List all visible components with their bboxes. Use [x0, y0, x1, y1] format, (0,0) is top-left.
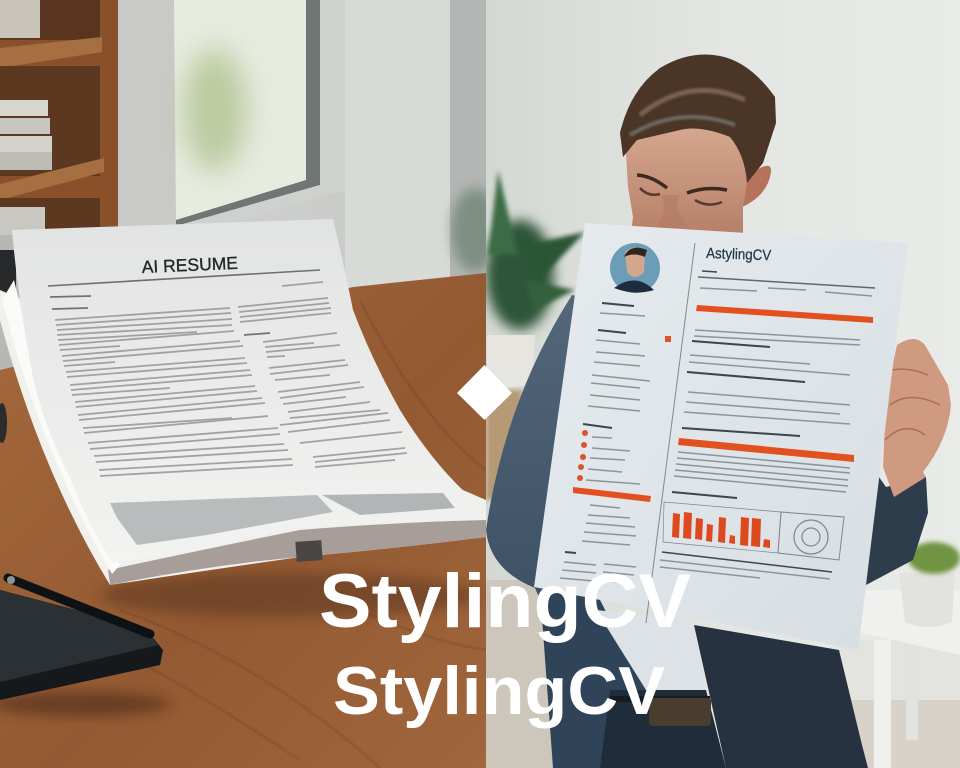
bar chart [672, 512, 770, 548]
side table with plant [858, 542, 960, 768]
man: right sleeve [866, 477, 928, 585]
resume text lines [50, 282, 407, 476]
orange bars [573, 305, 873, 502]
man: jacket left panel [540, 590, 646, 768]
bullet icons [577, 336, 671, 481]
man: shirt [598, 610, 664, 690]
title: StylingCV line 2: StylingCV [333, 653, 665, 729]
light wall background [622, 0, 960, 759]
resume front sheet [12, 219, 463, 542]
CV text lines [560, 271, 875, 584]
man: left sleeve [486, 295, 600, 600]
profile photo [610, 243, 660, 293]
black notebook with pen [0, 576, 170, 716]
title: StylingCV line 1: StylingCV [319, 559, 691, 644]
potted plant [486, 170, 585, 390]
man: right hand [883, 339, 951, 497]
man: head and hair [620, 54, 776, 240]
resume heading: AI RESUME [141, 253, 238, 277]
floor [486, 390, 960, 768]
panel: left desk scene [0, 0, 499, 768]
diamond divider [457, 365, 512, 420]
man: jacket right panel [694, 625, 868, 768]
AI resume paper stack [0, 219, 486, 585]
bookshelf [0, 0, 118, 370]
wooden table [0, 273, 486, 768]
wall and window background [118, 0, 486, 277]
panel: right man holding styled CV [486, 0, 960, 768]
man: trousers and belt [600, 690, 726, 768]
CV brand heading: AstylingCV [706, 245, 771, 264]
styled CV sheet [534, 223, 908, 650]
round diagram [663, 502, 844, 560]
